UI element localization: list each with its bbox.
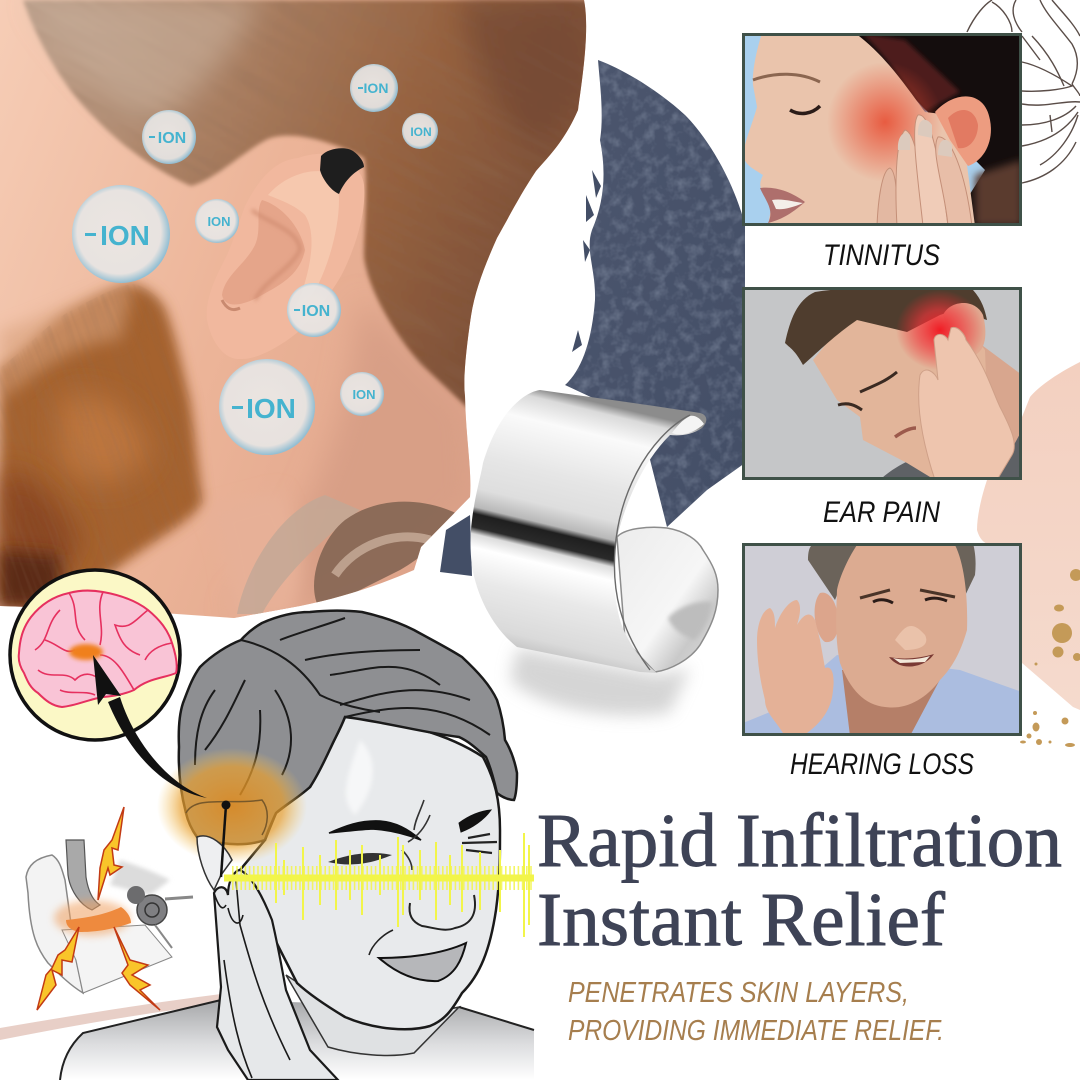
face (813, 314, 986, 477)
curved arrow from ear to brain (93, 655, 207, 798)
neck shading (263, 325, 470, 613)
ear (943, 303, 985, 355)
ear (935, 96, 991, 166)
ion bubble top: ION (364, 80, 388, 96)
skin below the beard (235, 526, 304, 618)
ion bubble top left: ION (158, 130, 186, 147)
ink brush blot (440, 55, 750, 576)
ion bubble large left: ION (100, 220, 150, 251)
ion bubble neck: ION (352, 387, 376, 402)
mouth (760, 188, 805, 223)
device on ear (320, 148, 364, 194)
fingers (877, 115, 972, 226)
label: ear pain: EAR PAIN (823, 496, 940, 529)
illustration: person with ear pain (60, 610, 534, 1080)
silver ear cuff ring (470, 390, 718, 715)
neck (842, 670, 945, 736)
ion bubble by lobe (287, 283, 341, 337)
neck tattoo (237, 495, 460, 614)
ear (197, 836, 232, 890)
ion bubble small top right: ION (410, 125, 432, 139)
eyes and mouth (838, 372, 897, 410)
hair (785, 287, 987, 365)
ear (220, 148, 364, 356)
hair (808, 543, 976, 600)
peach paint blot with gold flecks (977, 362, 1080, 747)
pointer line (221, 805, 226, 877)
shirt (743, 655, 1022, 736)
pink brush stroke (0, 994, 221, 1040)
brows and eyes (329, 821, 421, 840)
cut hair (22, 0, 586, 410)
photo: man's ear and neck (0, 0, 586, 618)
lightning bolts (98, 807, 124, 900)
eyes and mouth (860, 590, 955, 598)
subtitle: PROVIDING IMMEDIATE RELIEF. (568, 1015, 944, 1047)
shoulders (60, 1000, 534, 1080)
photo card: ear pain (742, 287, 1022, 480)
ion bubbles (72, 64, 438, 455)
face (743, 33, 975, 226)
shirt (883, 436, 1019, 477)
ion bubble large bottom (219, 359, 315, 455)
subtitle (568, 977, 944, 1047)
nose (410, 895, 475, 930)
neck and collar (286, 975, 459, 1055)
ion bubble large left (72, 185, 170, 283)
face (836, 545, 967, 708)
ion bubble top (350, 64, 398, 112)
ion bubble small top right (402, 113, 438, 149)
ion bubble large bottom: ION (246, 393, 296, 424)
beard (0, 278, 211, 607)
inner ear diagram (26, 807, 193, 1010)
hand (757, 600, 834, 733)
sound wave (224, 833, 534, 937)
face (240, 717, 500, 1029)
hand (214, 870, 338, 1080)
title: Rapid Infiltration (537, 799, 1062, 883)
mouth (379, 943, 466, 981)
subtitle: PENETRATES SKIN LAYERS, (568, 977, 909, 1009)
ion bubble by temple (195, 199, 239, 243)
title: Instant Relief (537, 878, 946, 962)
ear pain glow (157, 748, 307, 864)
ion bubble by lobe: ION (302, 303, 330, 320)
label: hearing loss: HEARING LOSS (790, 748, 974, 781)
flower line art (967, 0, 1080, 183)
hair and neck (850, 33, 1022, 226)
photo card: hearing loss (742, 543, 1022, 736)
hand (919, 327, 1014, 480)
neck (982, 346, 1019, 444)
title (537, 799, 1062, 962)
hair (179, 610, 517, 844)
eye and brow (753, 74, 820, 82)
brain inset circle (10, 570, 180, 740)
photo card: tinnitus (742, 33, 1022, 226)
ear (815, 593, 838, 642)
label: tinnitus: TINNITUS (823, 239, 940, 272)
ion bubble top left (142, 110, 196, 164)
ion bubble neck (340, 372, 384, 416)
ion bubble by temple: ION (207, 214, 231, 229)
